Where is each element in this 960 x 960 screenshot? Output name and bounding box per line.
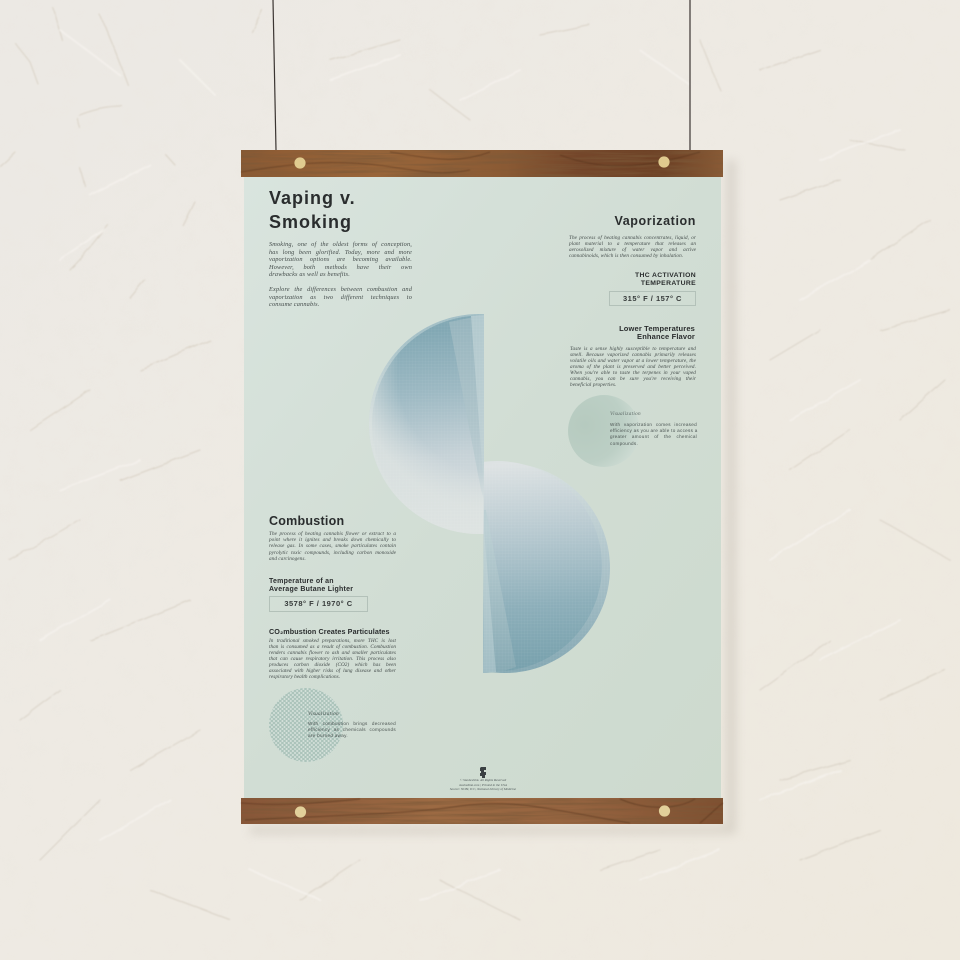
visualization text: vaporization: With vaporization comes increased [610, 422, 697, 427]
visualization text: vaporization: compounds. [610, 441, 638, 446]
particulates text: that can cause respiratory irritation. This process also [269, 656, 396, 662]
flavor text: smell. Because vaporized cannabis primarily releases [570, 352, 696, 358]
footer credits: Source: NCBI, ICC, National Library of Medicine [450, 787, 516, 791]
combustion description [268, 531, 396, 562]
combustion description: pyrolytic toxic compounds, including carbon monoxide [269, 550, 396, 556]
temperature box: lighter [269, 596, 368, 612]
intro text [269, 241, 412, 308]
footer credits: © Stashed Ink. All Rights Reserved [460, 778, 506, 782]
particulates text: associated with higher risks of lung disease and other [269, 668, 396, 674]
particulates text [268, 638, 396, 680]
footer credits: stashedink.com | Printed in the USA [459, 783, 507, 787]
intro text: Smoking, one of the oldest forms of conception, [269, 241, 412, 248]
temperature box: THC: 315° F / 157° C [623, 294, 682, 303]
visualization label: vaporization: Visualization [610, 411, 641, 417]
footer credits [450, 778, 516, 791]
visualization text: vaporization [610, 422, 698, 446]
title: Smoking [269, 212, 352, 232]
visualization text: combustion [308, 721, 396, 738]
particulates text: In traditional smoked preparations, more THC is lost [269, 638, 396, 644]
intro text: has long been glorified. Today, more and more [269, 248, 412, 256]
vaporization visual circle [568, 395, 640, 467]
combustion description: The process of heating cannabis flower or extract to a [269, 531, 396, 537]
logo mark [480, 767, 486, 778]
intro text: vaporization as two different techniques to [269, 294, 412, 300]
heading: THC activation temperature [635, 272, 696, 287]
visualization text: combustion: are burned away. [308, 733, 348, 738]
heading: butane lighter temperature [269, 578, 353, 593]
flavor text: beneficial properties. [570, 382, 616, 388]
combustion description: release gas. In some cases, smoke particulates contain [269, 543, 396, 549]
vaporization description: aerosolized mixture of water vapor and active [569, 247, 696, 253]
heading: butane lighter temperature: Average Butane Lighter [269, 586, 353, 593]
chart: vaporization half circle [370, 314, 484, 534]
top wooden hanger [241, 150, 723, 177]
heading: THC activation temperature: TEMPERATURE [641, 280, 696, 287]
visualization label: combustion: Visualization [308, 711, 339, 717]
particulates text: renders cannabis flower to ash and smaller particulates [269, 650, 396, 656]
temperature box: lighter: 3578° F / 1970° C [284, 599, 353, 608]
flavor text [570, 346, 696, 388]
intro text: However, both methods have their own [269, 264, 412, 270]
heading: THC activation temperature: THC ACTIVATION [635, 272, 696, 279]
particulates text: produces carbon dioxide (CO2) which has been [269, 662, 396, 668]
intro text: drawbacks as well as benefits. [269, 271, 350, 278]
visualization text: combustion: efficiency as chemicals compounds [308, 727, 396, 732]
heading: lower temperatures [619, 324, 695, 341]
combustion visual circle [269, 688, 343, 762]
vaporization description [568, 234, 696, 259]
combustion description: and carcinogens. [269, 556, 306, 562]
temperature box: THC [609, 291, 696, 306]
flavor text: aroma of the plant is preserved and better perceived. [570, 364, 696, 370]
title: Vaping v. [269, 188, 356, 208]
poster shadow on wall [250, 160, 736, 834]
flavor text: Taste is a sense highly susceptible to temperature and [570, 346, 696, 352]
hanging wires [273, 0, 690, 150]
heading: lower temperatures: Lower Temperatures [619, 324, 695, 333]
vaporization description: cannabinoids, which is then consumed by inhalation. [569, 253, 683, 259]
heading: particulates: CO₂mbustion Creates Particulates [269, 627, 390, 636]
chart: combustion half circle [483, 461, 610, 673]
heading: butane lighter temperature: Temperature of an [269, 578, 334, 585]
flavor text: cannabis, you can be sure you're receiving their [570, 376, 696, 382]
heading: lower temperatures: Enhance Flavor [637, 332, 695, 341]
intro text: vaporization options are becoming available. [269, 256, 412, 263]
intro text: Explore the differences between combustion and [269, 286, 412, 293]
heading: vaporization: Vaporization [614, 214, 696, 228]
particulates text: respiratory health complications. [269, 674, 340, 680]
visualization text: vaporization: efficiency as you are able to access a [610, 428, 698, 433]
flavor text: When you're able to taste the terpenes in your vaped [570, 370, 696, 376]
bottom wooden hanger [241, 798, 723, 824]
poster sheet [244, 177, 721, 798]
vaporization description: The process of heating cannabis concentrates, liquid, or [569, 234, 696, 240]
title [269, 188, 356, 232]
visualization text: combustion: With combustion brings decreased [308, 721, 396, 726]
combustion description: point where it ignites and breaks down chemically to [269, 537, 396, 543]
flavor text: volatile oils and water vapor at a lower temperature, the [570, 358, 696, 364]
intro text: consume cannabis. [269, 301, 319, 308]
heading: combustion: Combustion [269, 514, 344, 528]
vaporization description: plant material to a temperature that releases an [569, 241, 696, 247]
particulates text: than is consumed as a result of combustion. Combustion [269, 644, 396, 650]
visualization text: vaporization: greater amount of the chemical [610, 434, 697, 439]
